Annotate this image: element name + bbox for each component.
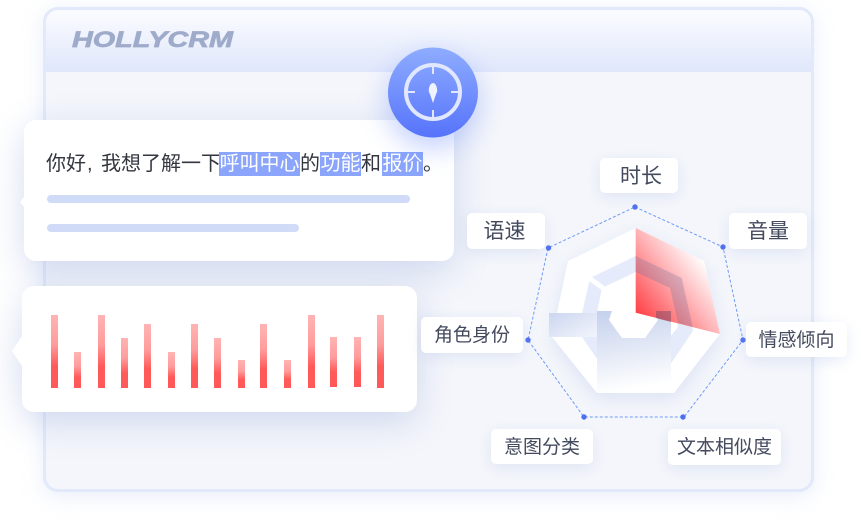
vertical gradient block [597, 311, 671, 393]
label: 文本相似度: 文本相似度 [677, 437, 772, 458]
label: 情感倾向 [746, 322, 847, 357]
label: 时长 [600, 158, 678, 193]
text placeholder line 2 [47, 224, 299, 232]
sentence with highlighted keywords [46, 152, 443, 176]
label: 音量 [729, 213, 807, 249]
radar dashed outline [528, 207, 743, 417]
window header bar [46, 10, 811, 72]
sentence with highlighted keywords: 的 [300, 153, 320, 175]
radar outer area [552, 228, 720, 393]
sentence with highlighted keywords: 我想了解一下 [101, 153, 221, 175]
block overlay on data area [656, 311, 671, 322]
label: 角色身份: 角色身份 [434, 325, 510, 346]
label: 语速 [467, 213, 545, 249]
sentence with highlighted keywords: 。 [423, 153, 443, 175]
card background with notch [3, 284, 432, 438]
label: 意图分类: 意图分类 [504, 437, 580, 458]
sentence with highlighted keywords: , [87, 153, 93, 175]
radar outer shadow [552, 234, 720, 399]
text placeholder line 1 [47, 195, 410, 203]
card background with notch [8, 114, 470, 286]
bar chart: audio waveform [51, 315, 384, 388]
sentence with highlighted keywords: 功能 [320, 153, 360, 175]
radar vertices [525, 204, 746, 420]
label: 文本相似度 [668, 429, 781, 465]
radar diagonal axis [575, 268, 617, 298]
sentence with highlighted keywords: 报价 [382, 153, 422, 175]
label: 情感倾向: 情感倾向 [758, 330, 834, 351]
radar center [609, 292, 658, 338]
sentence with highlighted keywords: 呼叫中心 [220, 153, 300, 175]
radar middle ring [578, 256, 693, 375]
sentence with highlighted keywords: 你好 [46, 153, 86, 175]
label: 时长: 时长 [620, 165, 662, 188]
label: 音量: 音量 [747, 220, 789, 243]
radar data area: red [636, 228, 720, 334]
icon: compass badge [374, 44, 492, 161]
ring overlay on data area [636, 256, 693, 327]
horizontal gradient block [549, 313, 597, 337]
sentence with highlighted keywords: 和 [361, 153, 381, 175]
panel: speech text card [8, 114, 470, 286]
logo: HOLLYCRM: HOLLYCRM [72, 27, 234, 52]
label: 意图分类 [491, 429, 593, 464]
label: 角色身份 [421, 317, 523, 353]
panel: waveform card [3, 284, 432, 438]
label: 语速: 语速 [484, 220, 526, 243]
